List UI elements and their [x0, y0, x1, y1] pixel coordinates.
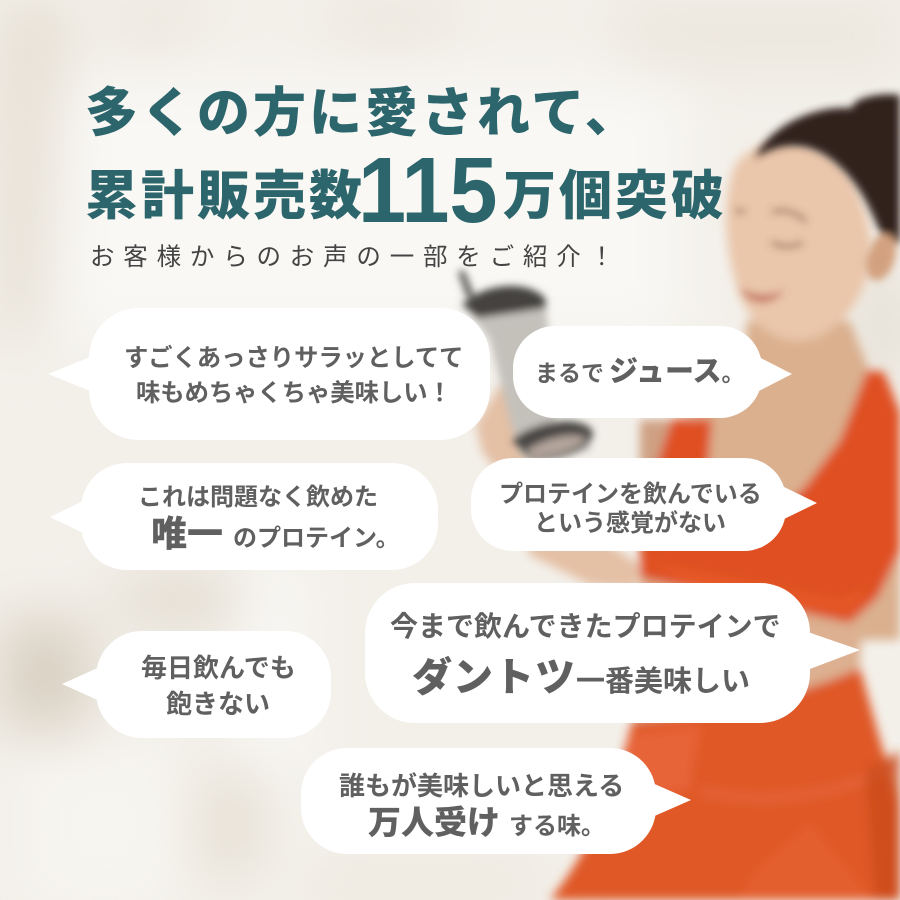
bubble 5 [62, 631, 331, 738]
bubble text 6 [390, 611, 781, 700]
bubble 2 [513, 326, 792, 418]
subtitle: お客様からのお声の一部をご紹介！ [90, 244, 623, 271]
bubble 1 [48, 308, 490, 440]
bubble text 3: 唯一 のプロテイン。 [151, 513, 400, 554]
bubble text 2: まるでジュース。 [535, 356, 745, 388]
bubble text 4: という感覚がない [534, 510, 726, 537]
bubble text 5: 飽きない [166, 689, 270, 719]
title [85, 84, 727, 271]
bubble text 4 [499, 481, 762, 537]
bubble text 7 [339, 771, 624, 841]
bubble 3 [50, 463, 438, 570]
bubble text 4: プロテインを飲んでいる [499, 481, 762, 508]
title line 2 left: 累計販売数 [85, 167, 365, 226]
bubble text 3: これは問題なく飲めた [138, 484, 378, 511]
bubble text 3 [138, 484, 400, 554]
bubble text 1: 味もめちゃくちゃ美味しい！ [136, 380, 452, 407]
bubble 4 [471, 458, 817, 551]
bubble 7 [301, 748, 691, 854]
bubble text 6: 今まで飲んできたプロテインで [390, 611, 781, 642]
title line 1: 多くの方に愛されて、 [85, 84, 641, 143]
bubble text 7: 万人受け する味。 [368, 804, 605, 841]
title number 115: 115 [358, 138, 498, 242]
bubble text 5: 毎日飲んでも [141, 653, 296, 683]
bubble text 7: 誰もが美味しいと思える [339, 771, 624, 801]
bubble 6 [365, 583, 860, 723]
bubble text 6: ダントツ一番美味しい [412, 656, 750, 700]
bubble text 1: すごくあっさりサラッとしてて [124, 345, 463, 372]
bubble text 1 [124, 344, 463, 407]
bubble text 5 [141, 653, 296, 719]
woman [476, 142, 900, 900]
title line 2 right: 万個突破 [503, 167, 727, 226]
